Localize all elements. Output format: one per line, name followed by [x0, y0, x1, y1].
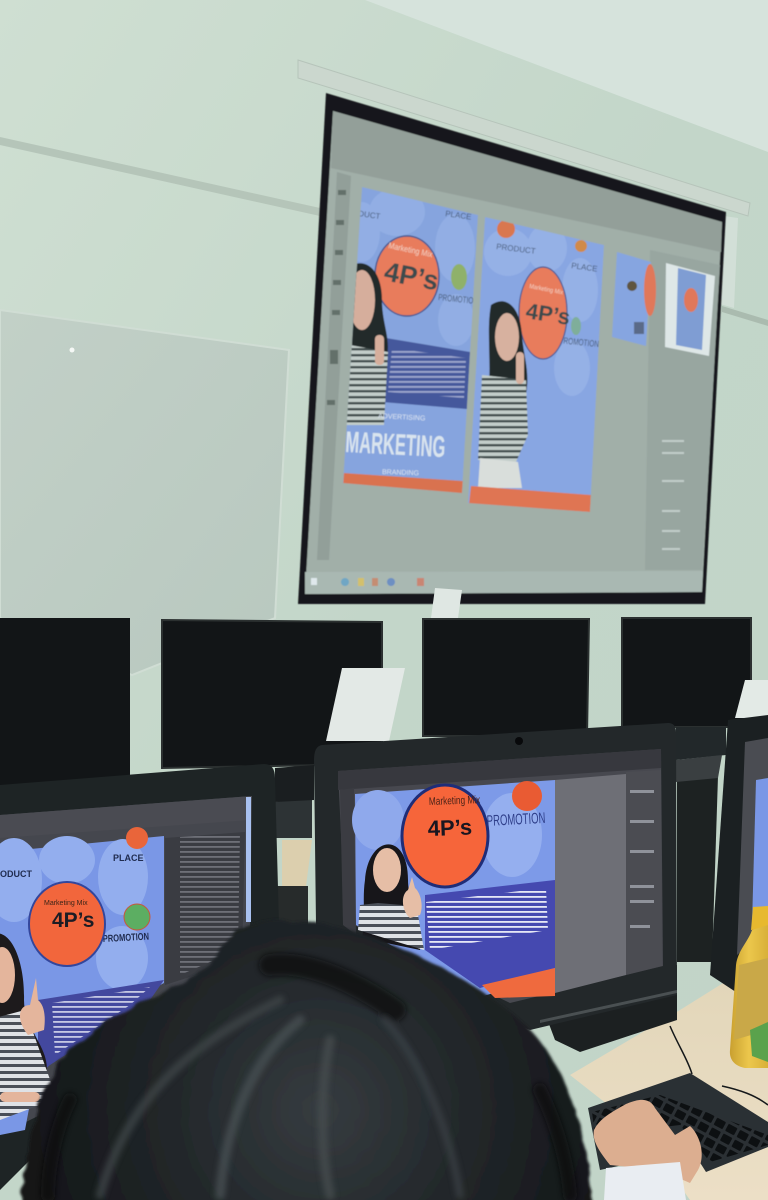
bottle cap	[751, 906, 768, 930]
back monitor four	[622, 618, 751, 727]
poster one	[343, 187, 479, 494]
back monitor three	[423, 619, 589, 736]
small artboard	[612, 252, 656, 346]
hair mass	[20, 921, 594, 1200]
right monitor bezel	[710, 715, 768, 1000]
poster one orange circle	[375, 236, 439, 316]
poster two labels: PRODUCT	[496, 242, 536, 256]
left poster top badge	[126, 827, 148, 849]
bottle label	[734, 958, 768, 1040]
left poster green icon	[124, 904, 150, 930]
left poster background	[0, 836, 164, 1135]
right monitor display	[737, 738, 768, 955]
center poster person	[358, 844, 424, 950]
desk	[570, 955, 768, 1200]
screen side case	[720, 216, 738, 308]
left monitor menu bar	[0, 796, 252, 838]
poster one person	[345, 263, 388, 425]
poster one labels: PLACE	[445, 209, 472, 222]
left poster orange circle	[29, 882, 105, 966]
left poster labels: PROMOTION	[103, 931, 149, 944]
poster two orange circle	[519, 267, 567, 359]
center poster orange circle	[402, 785, 488, 887]
poster one green icon	[451, 264, 467, 290]
webcam	[515, 737, 523, 745]
taskbar icons	[311, 578, 424, 586]
poster two service circles	[484, 224, 598, 396]
projector screen housing	[298, 60, 750, 216]
bottle body	[730, 925, 768, 1068]
center monitor menu bar	[338, 749, 661, 790]
poster one service circles	[357, 192, 474, 346]
center poster orange footer	[482, 968, 555, 998]
center poster blue panel	[425, 880, 555, 988]
center poster	[352, 780, 555, 998]
right properties panel	[645, 250, 720, 570]
center poster text lines	[426, 888, 548, 950]
paper tag under screen	[431, 588, 462, 618]
tool icons	[327, 190, 346, 405]
center monitor display	[338, 749, 663, 1003]
head of hair	[20, 921, 594, 1200]
projector screen	[298, 93, 726, 604]
center poster circle title: Marketing Mix	[429, 794, 481, 808]
thumbnail navigator	[665, 263, 715, 356]
back right keyboard	[676, 755, 722, 782]
left monitor display	[0, 796, 252, 1135]
paper note right	[735, 680, 768, 718]
paper note	[326, 668, 405, 741]
left poster text lines	[52, 987, 150, 1055]
center poster left circle	[352, 790, 404, 850]
left poster circles	[0, 836, 148, 990]
poster one 4P's: 4P’s	[382, 256, 441, 296]
poster two labels: PROMOTION	[559, 335, 600, 349]
center monitor bezel	[314, 723, 677, 1030]
back monitor two	[162, 620, 382, 768]
keyboard	[588, 1073, 768, 1172]
whiteboard	[0, 310, 289, 675]
center poster background	[355, 780, 555, 997]
right monitor	[710, 715, 768, 1000]
center monitor grey canvas	[555, 774, 626, 993]
left monitor	[0, 764, 279, 1190]
right monitor poster	[752, 778, 768, 925]
poster two	[468, 217, 604, 512]
center monitor right panel	[626, 770, 662, 975]
poster one branding word: BRANDING	[382, 469, 419, 477]
dark column between monitors	[275, 765, 314, 802]
left monitor bezel	[0, 764, 279, 1190]
back desk top	[282, 840, 312, 886]
wall trim rail	[0, 137, 768, 326]
poster two 4P's: 4P’s	[524, 298, 572, 330]
poster two labels: PLACE	[571, 261, 598, 274]
center monitor stand	[540, 965, 677, 1052]
left poster labels: PLACE	[113, 853, 144, 863]
poster one labels	[358, 209, 479, 306]
poster one background	[343, 187, 478, 493]
left poster	[0, 827, 164, 1135]
hand on keyboard	[594, 1100, 702, 1183]
poster two orange footer	[469, 486, 591, 512]
bottle green leaf	[750, 1022, 768, 1062]
monitor chin highlight	[540, 990, 677, 1023]
left poster circle title: Marketing Mix	[44, 900, 88, 907]
left tools panel	[317, 172, 351, 560]
back keyboard	[275, 796, 312, 838]
ceiling	[365, 0, 768, 152]
center monitor tool strip	[340, 788, 356, 935]
poster two labels	[496, 242, 600, 349]
poster one small words: ADVERTISING	[378, 413, 426, 422]
center monitor	[314, 723, 677, 1052]
back monitor stand	[676, 727, 726, 760]
white shirt sleeve	[604, 1162, 686, 1200]
left poster 4P's: 4P’s	[52, 909, 94, 932]
back row desk cabinet	[677, 776, 718, 962]
left poster labels: ODUCT	[0, 869, 32, 879]
application top bar	[331, 111, 722, 252]
poster two top icons	[497, 220, 587, 335]
poster one body text	[388, 348, 466, 398]
whiteboard glare dot	[70, 348, 74, 352]
center poster 4P's: 4P’s	[427, 814, 473, 841]
keyboard cable	[670, 1026, 768, 1105]
poster one marketing word: MARKETING	[345, 426, 446, 464]
keyboard body	[588, 1073, 768, 1172]
left poster person	[0, 933, 52, 1120]
poster one labels: DUCT	[358, 209, 381, 221]
center poster promotion circle	[482, 793, 542, 877]
keyboard key field	[592, 1095, 768, 1162]
screen frame	[298, 93, 726, 604]
water bottle	[730, 906, 768, 1068]
poster two background	[468, 217, 604, 512]
left layer panel	[165, 797, 251, 985]
poster one orange footer	[343, 473, 463, 494]
hair highlights	[48, 964, 570, 1195]
left poster blue text panel	[38, 980, 164, 1075]
poster one circle title: Marketing Mix	[388, 241, 434, 259]
back monitor one	[0, 618, 130, 790]
application status bar	[305, 571, 703, 594]
center poster promotion label: PROMOTION	[486, 809, 546, 830]
left poster labels	[0, 853, 149, 944]
poster one dark blue panel	[382, 338, 470, 409]
projected application window	[305, 111, 722, 594]
poster one labels: PROMOTION	[438, 292, 479, 306]
poster two person	[478, 301, 528, 488]
center poster red badge	[512, 781, 542, 811]
poster two circle title: Marketing Mix	[529, 284, 563, 297]
